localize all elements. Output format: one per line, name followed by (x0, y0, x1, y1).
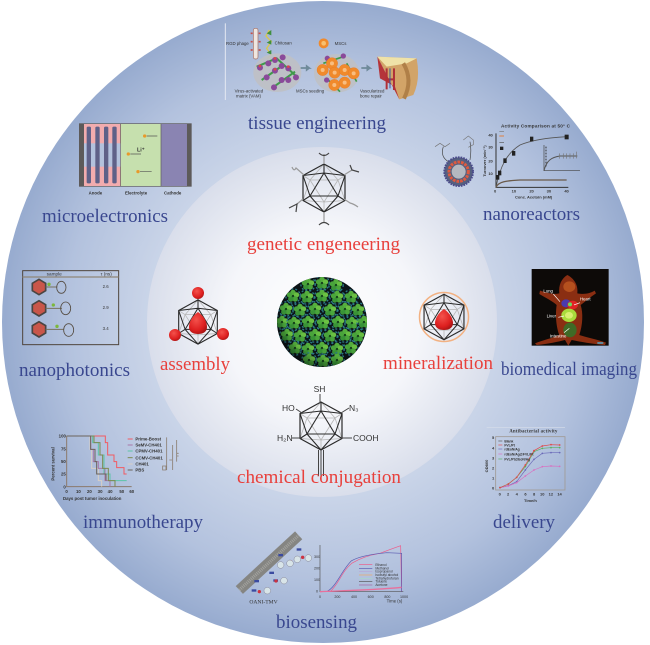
captions: Chitosan (275, 41, 292, 46)
sensor chart: 800 (384, 595, 390, 599)
central virus particle (275, 276, 371, 368)
legend: rdEoN/Ag@FVL/Pt (504, 452, 534, 456)
organ labels: Lung (543, 288, 554, 293)
activity chart: 20 (488, 158, 494, 163)
icon: chemical conjugation icosahedron: H₂N (277, 433, 293, 443)
sensor legend: Acetone (375, 583, 388, 587)
growth curves (500, 445, 560, 488)
activity chart: 40 (488, 133, 494, 138)
icon: chemical conjugation icosahedron (277, 384, 378, 476)
panel: microelectronics battery (79, 123, 192, 196)
axis labels: 20 (87, 489, 92, 494)
activity chart: Turnover (min⁻¹) (482, 145, 487, 177)
panel: biomedical imaging mouse (532, 269, 609, 346)
label: biosensing: biosensing (276, 612, 357, 633)
icon: chemical conjugation icosahedron: COOH (353, 433, 378, 443)
polymer molecules (252, 548, 312, 594)
organ labels (543, 288, 591, 338)
battery captions (89, 191, 182, 196)
panel: immunotherapy survival chart (50, 433, 179, 501)
panel: delivery antibacterial chart: Antibacterial activity (509, 430, 558, 435)
legend: CPMV-CH401 (135, 449, 163, 454)
anode rods (87, 127, 117, 183)
significance brackets (163, 437, 179, 470)
inset chart (544, 145, 580, 171)
sensor chart: 0 (319, 595, 321, 599)
arrows (301, 66, 370, 70)
captions: MSCs seeding (296, 88, 325, 93)
label: biomedical imaging: biomedical imaging (501, 359, 637, 380)
icon: chemical conjugation icosahedron: HO (282, 403, 295, 413)
nanoreactor sphere (442, 142, 473, 186)
legend: SeMV-CH401 (135, 443, 162, 448)
axis labels: 8 (533, 491, 536, 496)
substrates (435, 136, 473, 147)
axis labels: 60 (129, 489, 135, 494)
legend: rdEoN/Ag (504, 447, 520, 451)
sensor chart: 600 (368, 595, 374, 599)
legend (498, 439, 534, 461)
sensor legend (359, 563, 399, 587)
icon: assembly icosahedron with spheres (169, 287, 229, 344)
panel: biosensing (239, 535, 408, 605)
captions: MSCs (335, 41, 346, 46)
sensor chart: 400 (351, 595, 357, 599)
sensor legend: Tetrahydrofuran (375, 576, 399, 580)
legend: CH401 (135, 462, 149, 467)
axis labels: Time/h (524, 498, 537, 503)
rod caption: OANI-TMV (249, 599, 279, 605)
icon: chemical conjugation icosahedron: N₃ (349, 403, 359, 413)
row 1: 2.6 (103, 284, 109, 289)
label: chemical conjugation: chemical conjugation (237, 467, 401, 488)
axis labels: 5 (492, 435, 495, 440)
captions: bone repair (360, 93, 382, 98)
sensor legend: Methanol (375, 566, 389, 570)
chitosan beads (267, 30, 271, 55)
axis labels: 4 (516, 491, 519, 496)
row 3: 3.4 (103, 326, 109, 331)
activity chart: Conc. Acetoin (mM) (515, 195, 553, 200)
legend: PBS (135, 468, 144, 473)
icon: mineralization icosahedron (420, 292, 468, 342)
captions: Virus-activated (235, 88, 264, 93)
sensor legend: Toluene (375, 580, 387, 584)
panel: delivery antibacterial chart: OD600 (484, 459, 489, 472)
electrolyte (121, 124, 161, 186)
axis labels: 2 (507, 491, 510, 496)
captions: RGD phage (226, 41, 249, 46)
axis labels: 14 (557, 491, 563, 496)
axis labels: 3 (492, 456, 495, 461)
axis labels: 10 (76, 489, 81, 494)
battery captions: Electrolyte (125, 191, 148, 196)
legend: Blank (504, 439, 514, 443)
sensor legend: Isobutyl alcohol (375, 573, 399, 577)
panel: nanoreactors (435, 123, 580, 200)
sensor chart (314, 545, 408, 603)
legend: FVL/Pt@EoN/Ag (504, 457, 530, 461)
axis labels: 4 (492, 446, 495, 451)
organs (561, 281, 578, 337)
axis labels (492, 435, 563, 503)
activity chart (482, 123, 571, 200)
sensor chart: 200 (314, 566, 320, 570)
survival curves (67, 436, 127, 487)
activity chart: Activity Comparison at 50° C (501, 123, 571, 128)
axis labels: 2 (492, 466, 495, 471)
row 2: 2.9 (103, 305, 109, 310)
lithium ions: Li⁺ (137, 148, 145, 154)
sensor chart: 0 (316, 590, 318, 594)
activity chart: 30 (547, 189, 552, 194)
phage rod (251, 28, 261, 59)
legend: CCMV-CH401 (135, 455, 163, 460)
MSC cell (319, 38, 329, 48)
axis labels (59, 433, 135, 501)
activity chart: 40 (564, 189, 570, 194)
label: immunotherapy: immunotherapy (83, 512, 203, 533)
legend: Prime-Boost (135, 437, 162, 442)
label: tissue engineering: tissue engineering (248, 113, 386, 134)
panel: nanophotonics table (23, 271, 119, 345)
scale bar (597, 342, 603, 344)
axis labels: 0 (499, 491, 502, 496)
axis labels: 0 (65, 489, 68, 494)
organ labels: Heart (580, 296, 591, 301)
battery captions: Cathode (164, 191, 182, 196)
sensor legend: Isopropanol (375, 570, 393, 574)
chart legend (499, 132, 504, 150)
sensor chart: 300 (314, 555, 320, 559)
panel: delivery antibacterial chart (484, 427, 565, 503)
sensor chart: 100 (314, 578, 320, 582)
bone wedge (377, 57, 418, 99)
organ labels: Liver (547, 313, 557, 318)
cell-seeded matrix (314, 53, 359, 93)
label: mineralization: mineralization (383, 353, 493, 374)
label: microelectronics: microelectronics (42, 206, 168, 227)
sensor legend: Ethanol (375, 563, 387, 567)
label: delivery: delivery (493, 512, 555, 533)
axis labels: 25 (61, 472, 66, 477)
icon: genetic engineering icosahedron (289, 153, 359, 225)
axis labels: 50 (61, 459, 66, 464)
matrix (253, 53, 301, 92)
axis labels: 0 (63, 484, 66, 489)
mouse body (535, 275, 606, 346)
TMV rod (239, 535, 299, 590)
panel: tissue engineering illustration (225, 23, 418, 100)
organ labels: Intestine (550, 333, 567, 338)
legend (128, 437, 163, 473)
icon: chemical conjugation icosahedron: SH (314, 384, 325, 394)
inner disc (147, 147, 497, 497)
activity chart: 10 (512, 189, 517, 194)
axis labels: 75 (61, 446, 66, 451)
captions (226, 41, 385, 98)
axis labels: 0 (492, 485, 495, 490)
activity chart: 10 (488, 171, 494, 176)
captions: Vascularized (360, 88, 385, 93)
axis labels: 50 (119, 489, 125, 494)
axis labels: 12 (549, 491, 554, 496)
activity chart: 0 (494, 189, 497, 194)
chitosan chain (266, 30, 271, 58)
axis labels: 6 (524, 491, 527, 496)
sensor chart: Time (s) (387, 598, 403, 603)
activity chart: 20 (529, 189, 535, 194)
panel: nanophotonics table: sample (47, 272, 62, 277)
activity chart: 30 (488, 144, 494, 149)
sensor chart: 1000 (400, 595, 408, 599)
label: nanoreactors: nanoreactors (483, 204, 580, 225)
axis labels: Days post tumor inoculation (63, 496, 122, 501)
battery captions: Anode (89, 191, 103, 196)
captions: matrix (VAM) (236, 93, 261, 98)
cathode (161, 124, 187, 186)
label: nanophotonics: nanophotonics (19, 360, 130, 381)
legend: FVL/Pt (504, 443, 516, 447)
axis labels: 30 (98, 489, 103, 494)
anode (84, 124, 120, 186)
panel: immunotherapy survival chart: Percent survival (50, 447, 55, 481)
axis labels: 10 (540, 491, 545, 496)
panel: nanophotonics table: τ (ns) (101, 272, 112, 277)
label: assembly: assembly (160, 354, 230, 375)
axis labels: 40 (108, 489, 113, 494)
label: genetic engineering: genetic engeneering (247, 234, 400, 255)
axis labels: 1 (492, 476, 495, 481)
sensor chart: 200 (334, 595, 340, 599)
axis labels: 100 (59, 433, 66, 438)
